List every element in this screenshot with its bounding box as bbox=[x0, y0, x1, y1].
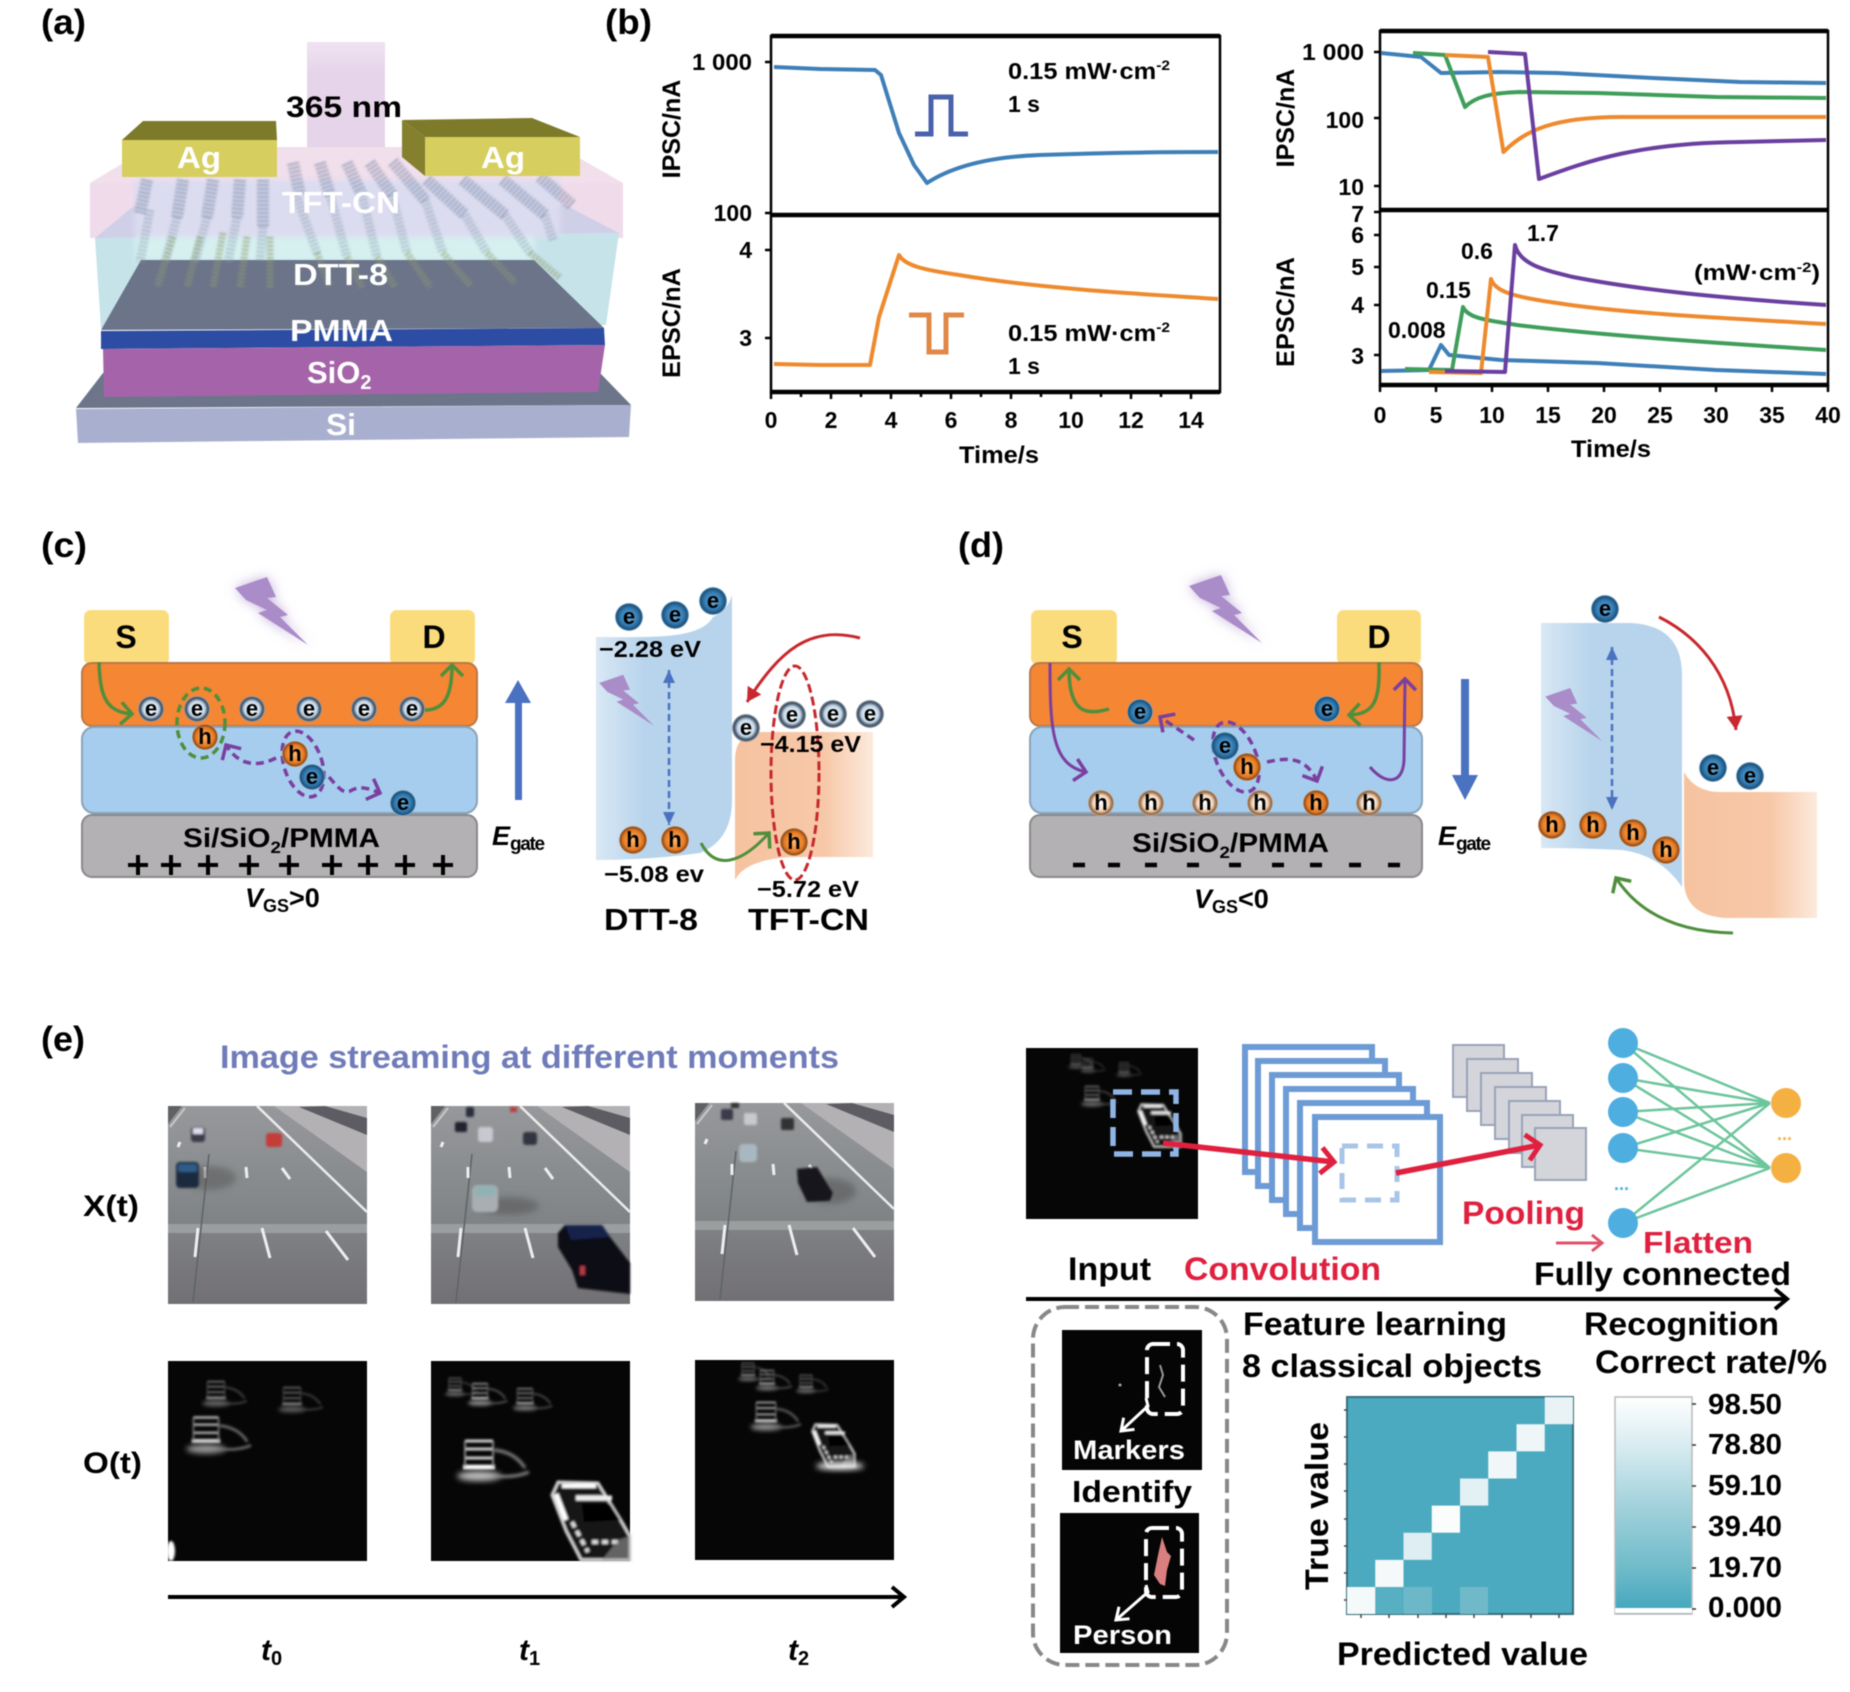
light blue DTT-8 layer bbox=[95, 180, 619, 328]
carriers on channel: e bbox=[406, 696, 418, 721]
plus charges bbox=[128, 855, 453, 875]
y tick labels: 100 bbox=[714, 200, 752, 226]
dashed excitation arrow bbox=[1611, 647, 1613, 810]
carriers: h bbox=[1309, 790, 1323, 815]
band carriers: e bbox=[707, 588, 719, 613]
x tick labels: 4 bbox=[885, 407, 898, 433]
left Ag electrode bbox=[122, 121, 277, 177]
band carriers: h bbox=[1626, 820, 1640, 845]
PMMA layer bbox=[101, 328, 605, 349]
axes frame bbox=[1374, 31, 1828, 392]
DTT-8 blue layer bbox=[1030, 727, 1422, 813]
series labels: 0.6 bbox=[1461, 238, 1493, 264]
gate stack: 2 bbox=[271, 838, 281, 857]
series labels bbox=[1388, 220, 1559, 343]
light beam 365 nm bbox=[307, 42, 385, 150]
x tick labels bbox=[1374, 402, 1841, 428]
x tick labels: 5 bbox=[1430, 402, 1443, 428]
x axis title Predicted value: Predicted value bbox=[1337, 1636, 1588, 1672]
band carriers: e bbox=[1707, 755, 1719, 780]
y tick labels: 1 000 bbox=[692, 49, 752, 75]
y tick labels: 4 bbox=[739, 237, 752, 263]
input neuron ellipsis: ... bbox=[1614, 1174, 1629, 1194]
gate dielectric top surface bbox=[101, 260, 604, 330]
convolution stack bbox=[1245, 1047, 1440, 1242]
unit label: (mW·cm bbox=[1694, 260, 1781, 285]
colour bar labels: 39.40 bbox=[1708, 1511, 1782, 1543]
band carriers bbox=[1538, 595, 1764, 864]
icon: positive pulse bbox=[915, 97, 968, 134]
example image: person: Person bbox=[1073, 1620, 1172, 1650]
D electrode bbox=[390, 610, 475, 665]
band carriers: h bbox=[1586, 812, 1600, 837]
carriers on channel: e bbox=[303, 696, 315, 721]
output neurons bbox=[1771, 1088, 1801, 1183]
blue IPSC curve bbox=[774, 67, 1218, 183]
right Ag electrode bbox=[402, 118, 580, 176]
small red arrow bbox=[1556, 1242, 1600, 1244]
arrow: gate field down bbox=[1452, 679, 1478, 800]
optical output image t0 bbox=[167, 1361, 367, 1561]
gate stack: /PMMA bbox=[281, 823, 380, 853]
layer labels: Si bbox=[326, 407, 356, 442]
carriers: h bbox=[1198, 790, 1212, 815]
colour bar labels: 0.000 bbox=[1708, 1592, 1782, 1624]
road image t0 bbox=[168, 1106, 367, 1304]
TFT-CN orange layer bbox=[82, 663, 477, 726]
red hole-transfer arrow bbox=[747, 635, 860, 702]
energy level labels: −5.72 eV bbox=[757, 876, 860, 902]
layer labels: PMMA bbox=[290, 313, 393, 348]
panel (a): device structure bbox=[41, 3, 631, 443]
label Identify: Identify bbox=[1072, 1474, 1193, 1509]
label t2: t bbox=[788, 1634, 798, 1667]
VGS label: GS bbox=[1212, 897, 1238, 917]
panel (e) left: image streaming bbox=[41, 1020, 904, 1670]
red electron arrow bbox=[1659, 617, 1736, 730]
x tick labels: 0 bbox=[765, 407, 777, 433]
x tick labels: 20 bbox=[1591, 402, 1617, 428]
example image: markers: Markers bbox=[1073, 1435, 1185, 1465]
intensity annotation top: -2 bbox=[1156, 57, 1170, 73]
pink TFT-CN layer bbox=[90, 147, 623, 238]
colour bar labels: 19.70 bbox=[1708, 1552, 1782, 1584]
label t2: 2 bbox=[798, 1648, 809, 1670]
unit label: -2 bbox=[1797, 259, 1812, 275]
x tick labels: 25 bbox=[1647, 402, 1673, 428]
icon: negative pulse bbox=[909, 315, 964, 352]
x tick labels: 14 bbox=[1178, 407, 1204, 433]
carriers: e bbox=[1219, 733, 1231, 758]
layer labels: Ag bbox=[177, 140, 221, 175]
label Recognition: Recognition bbox=[1584, 1306, 1779, 1342]
y tick labels: 3 bbox=[1351, 343, 1364, 369]
x tick labels bbox=[765, 407, 1204, 433]
label Correct rate: Correct rate/% bbox=[1595, 1344, 1827, 1380]
carriers: h bbox=[1362, 790, 1376, 815]
green transport arrows bbox=[1069, 662, 1379, 715]
gate stack bbox=[1030, 815, 1422, 877]
x tick labels: 10 bbox=[1058, 407, 1084, 433]
material labels bbox=[604, 902, 869, 937]
VGS label: <0 bbox=[1238, 884, 1269, 914]
unit label: ) bbox=[1811, 260, 1820, 285]
panel (c): VGS>0 mechanism bbox=[41, 526, 884, 937]
optical output image t1 bbox=[431, 1361, 630, 1561]
colour bar labels: 98.50 bbox=[1708, 1389, 1782, 1421]
example image: person bbox=[1060, 1513, 1199, 1653]
input image bbox=[1026, 1048, 1198, 1219]
label 8 classical objects: 8 classical objects bbox=[1242, 1348, 1542, 1384]
x axis title: Time/s bbox=[959, 442, 1039, 469]
gate stack bbox=[82, 815, 477, 877]
band carriers: h bbox=[1545, 812, 1559, 837]
colour bar labels: 59.10 bbox=[1708, 1470, 1782, 1502]
DTT-8 blue layer bbox=[82, 727, 477, 813]
icon: lightning bbox=[1189, 575, 1262, 643]
band carriers: e bbox=[1744, 763, 1756, 788]
layer labels: Ag bbox=[481, 140, 525, 175]
small red arrow head bbox=[1592, 1235, 1602, 1251]
y axis title EPSC: EPSC/nA bbox=[658, 268, 686, 378]
carriers on channel: e bbox=[397, 790, 409, 815]
band carriers bbox=[615, 587, 884, 856]
TFT-CN orange layer bbox=[1030, 663, 1422, 726]
row label O(t): O(t) bbox=[83, 1447, 142, 1480]
intensity annotation bottom: -2 bbox=[1156, 319, 1170, 335]
purple dashed arrows bbox=[226, 745, 380, 793]
icon: band lightning bbox=[1545, 688, 1602, 741]
layer labels: 2 bbox=[360, 372, 372, 394]
Si top surface bbox=[76, 373, 631, 408]
y tick labels: 6 bbox=[1351, 222, 1364, 248]
carriers on channel: e bbox=[191, 696, 203, 721]
carriers on channel: e bbox=[246, 696, 258, 721]
S electrode bbox=[84, 610, 169, 665]
dashed kernel box bbox=[1342, 1146, 1397, 1200]
y axis title True value: True value bbox=[1299, 1422, 1335, 1590]
red dashed ellipse bbox=[771, 666, 819, 880]
label t0: 0 bbox=[271, 1648, 282, 1670]
carriers: h bbox=[1094, 790, 1108, 815]
panel (e) right: CNN recognition bbox=[1026, 1028, 1827, 1672]
x tick labels: 10 bbox=[1479, 402, 1505, 428]
VGS label: >0 bbox=[289, 883, 320, 913]
carriers on channel bbox=[138, 696, 425, 816]
heatmap confusion matrix bbox=[1344, 1397, 1573, 1618]
energy band: TFT-CN bbox=[735, 732, 873, 880]
label t0: t bbox=[261, 1634, 271, 1667]
carriers on channel: h bbox=[198, 724, 212, 749]
chart: right IPSC / EPSC intensity series bbox=[1272, 31, 1841, 463]
y tick labels: 100 bbox=[1326, 107, 1364, 133]
purple transport arrows bbox=[1050, 663, 1405, 780]
label Pooling: Pooling bbox=[1462, 1195, 1585, 1231]
panel label (b): (b) bbox=[605, 3, 652, 42]
band carriers: e bbox=[740, 715, 752, 740]
label Convolution: Convolution bbox=[1184, 1251, 1381, 1287]
purple dashed exciton ring bbox=[1204, 715, 1268, 799]
energy level labels: −4.15 eV bbox=[760, 731, 862, 757]
y tick labels: 1 000 bbox=[1302, 39, 1364, 65]
y tick labels bbox=[1302, 39, 1364, 369]
carriers: h bbox=[1253, 790, 1267, 815]
label Fully connected: Fully connected bbox=[1534, 1256, 1791, 1292]
label Feature learning: Feature learning bbox=[1243, 1306, 1507, 1342]
colour bar labels bbox=[1708, 1389, 1782, 1624]
D electrode: D bbox=[422, 619, 446, 655]
x tick labels: 12 bbox=[1118, 407, 1144, 433]
dashed selection box bbox=[1113, 1092, 1176, 1154]
gate stack: 2 bbox=[1220, 843, 1230, 862]
panel label (a): (a) bbox=[41, 3, 86, 42]
panel label (e): (e) bbox=[41, 1020, 85, 1059]
material labels: DTT-8 bbox=[604, 902, 698, 937]
icon: band lightning bbox=[599, 675, 654, 726]
layer labels bbox=[177, 140, 525, 442]
Egate label: E bbox=[1438, 821, 1456, 851]
y axis title IPSC: IPSC/nA bbox=[658, 80, 686, 178]
chart: left IPSC / EPSC single pulse bbox=[658, 36, 1220, 469]
time axis arrow bbox=[168, 1595, 904, 1599]
x tick labels: 15 bbox=[1535, 402, 1561, 428]
band carriers: h bbox=[1659, 837, 1673, 862]
D electrode: D bbox=[1367, 619, 1391, 655]
green transport arrows bbox=[99, 662, 452, 714]
energy level labels: −2.28 eV bbox=[599, 636, 702, 662]
VGS label: V bbox=[245, 883, 263, 913]
energy level labels: −5.08 ev bbox=[604, 861, 704, 887]
x tick labels: 6 bbox=[945, 407, 957, 433]
carriers: e bbox=[1134, 699, 1146, 724]
nanowire strands bbox=[140, 162, 572, 287]
x axis title: Time/s bbox=[1571, 436, 1651, 463]
band carriers: h bbox=[787, 829, 801, 854]
panel label (d): (d) bbox=[958, 526, 1004, 565]
y tick labels: 10 bbox=[1338, 174, 1364, 200]
pooling stack bbox=[1453, 1045, 1586, 1180]
y axis title EPSC: EPSC/nA bbox=[1272, 257, 1300, 367]
band carriers: e bbox=[669, 602, 681, 627]
layer labels: TFT-CN bbox=[282, 185, 400, 220]
band carriers: e bbox=[1599, 596, 1611, 621]
red arrow input to convolution bbox=[1163, 1143, 1334, 1162]
x tick labels: 30 bbox=[1703, 402, 1729, 428]
purple dashed arrows bbox=[1160, 717, 1317, 781]
dashed examples box bbox=[1033, 1307, 1227, 1665]
carriers on channel: e bbox=[358, 696, 370, 721]
x tick labels: 0 bbox=[1374, 402, 1386, 428]
x tick labels: 8 bbox=[1005, 407, 1018, 433]
process arrow bbox=[1026, 1297, 1787, 1301]
material labels: TFT-CN bbox=[748, 902, 869, 937]
energy band: DTT-8 bbox=[1541, 623, 1682, 887]
row label X(t): X(t) bbox=[83, 1190, 139, 1223]
energy band: DTT-8 bbox=[596, 595, 732, 860]
y tick labels: 7 bbox=[1351, 201, 1364, 227]
energy band: TFT-CN bbox=[1684, 772, 1817, 918]
layer labels: SiO bbox=[307, 355, 360, 390]
minus charges bbox=[1073, 863, 1400, 867]
y tick labels: 5 bbox=[1351, 254, 1364, 280]
road image t2 bbox=[695, 1103, 894, 1301]
layer labels: DTT-8 bbox=[293, 257, 388, 292]
Egate label: E bbox=[492, 821, 510, 851]
gate stack: Si/SiO bbox=[183, 823, 263, 853]
band carriers: e bbox=[827, 701, 839, 726]
y tick labels bbox=[692, 49, 752, 351]
intensity annotation bottom: 0.15 mW·cm bbox=[1008, 320, 1142, 346]
gate stack: /PMMA bbox=[1230, 828, 1329, 858]
colour bar labels: 78.80 bbox=[1708, 1429, 1782, 1461]
band carriers: h bbox=[626, 827, 640, 852]
IPSC curves bbox=[1381, 52, 1826, 179]
series labels: 0.15 bbox=[1426, 277, 1471, 303]
input neurons bbox=[1608, 1028, 1638, 1238]
y tick labels: 3 bbox=[739, 325, 752, 351]
EPSC curves bbox=[1381, 245, 1826, 374]
y axis title IPSC: IPSC/nA bbox=[1272, 69, 1300, 167]
365 nm label: 365 nm bbox=[286, 91, 402, 124]
Egate label: gate bbox=[1456, 834, 1491, 855]
red arrow convolution to pooling bbox=[1396, 1145, 1540, 1173]
D electrode bbox=[1337, 610, 1421, 665]
series labels: 0.008 bbox=[1388, 317, 1446, 343]
carriers on channel: h bbox=[288, 741, 302, 766]
duration annotation bottom: 1 s bbox=[1008, 353, 1040, 379]
x tick labels: 40 bbox=[1815, 402, 1841, 428]
icon: lightning bbox=[235, 577, 308, 645]
carriers: h bbox=[1144, 790, 1158, 815]
VGS label: GS bbox=[263, 896, 289, 916]
carriers on channel: e bbox=[145, 696, 157, 721]
S electrode: S bbox=[1061, 619, 1083, 655]
label Input: Input bbox=[1068, 1251, 1151, 1287]
label t1: 1 bbox=[529, 1648, 540, 1670]
x tick labels: 35 bbox=[1759, 402, 1785, 428]
band carriers: e bbox=[623, 604, 635, 629]
example image: markers bbox=[1062, 1330, 1202, 1470]
dashed excitation arrow bbox=[668, 670, 670, 825]
carriers: h bbox=[1240, 754, 1254, 779]
green charge-transfer arrow bbox=[701, 833, 769, 860]
orange EPSC curve bbox=[774, 255, 1218, 365]
band carriers: h bbox=[668, 827, 682, 852]
Si front face bbox=[76, 405, 631, 443]
Egate label: gate bbox=[510, 834, 545, 855]
x tick labels: 2 bbox=[825, 407, 837, 433]
road image t1 bbox=[431, 1106, 630, 1304]
axes frame bbox=[765, 36, 1220, 399]
intensity annotation top: 0.15 mW·cm bbox=[1008, 58, 1142, 84]
panel label (c): (c) bbox=[41, 526, 87, 565]
y tick labels: 4 bbox=[1351, 292, 1364, 318]
green dashed exciton ring bbox=[177, 688, 225, 758]
gate stack: Si/SiO bbox=[1132, 828, 1212, 858]
duration annotation top: 1 s bbox=[1008, 91, 1040, 117]
S electrode bbox=[1031, 610, 1117, 665]
series labels: 1.7 bbox=[1527, 220, 1559, 246]
carriers bbox=[1088, 696, 1382, 816]
title: Image streaming at different moments bbox=[220, 1039, 839, 1075]
band carriers: e bbox=[864, 701, 876, 726]
band carriers: e bbox=[786, 702, 798, 727]
green hole arrow bbox=[1616, 878, 1733, 933]
output neuron ellipsis: ... bbox=[1777, 1124, 1792, 1144]
purple dashed exciton ring bbox=[274, 726, 332, 802]
energy level labels bbox=[599, 636, 862, 902]
fully connected connections bbox=[1623, 1043, 1770, 1223]
carriers on channel: e bbox=[306, 764, 318, 789]
optical output image t2 bbox=[695, 1360, 894, 1560]
colour bar bbox=[1615, 1397, 1696, 1614]
label Flatten: Flatten bbox=[1643, 1225, 1753, 1260]
label t1: t bbox=[519, 1634, 529, 1667]
carriers: e bbox=[1321, 696, 1333, 721]
arrow: gate field up bbox=[505, 680, 531, 800]
S electrode: S bbox=[115, 619, 137, 655]
panel (d): VGS<0 mechanism bbox=[958, 526, 1817, 933]
SiO2 layer bbox=[103, 345, 605, 397]
VGS label: V bbox=[1194, 884, 1212, 914]
